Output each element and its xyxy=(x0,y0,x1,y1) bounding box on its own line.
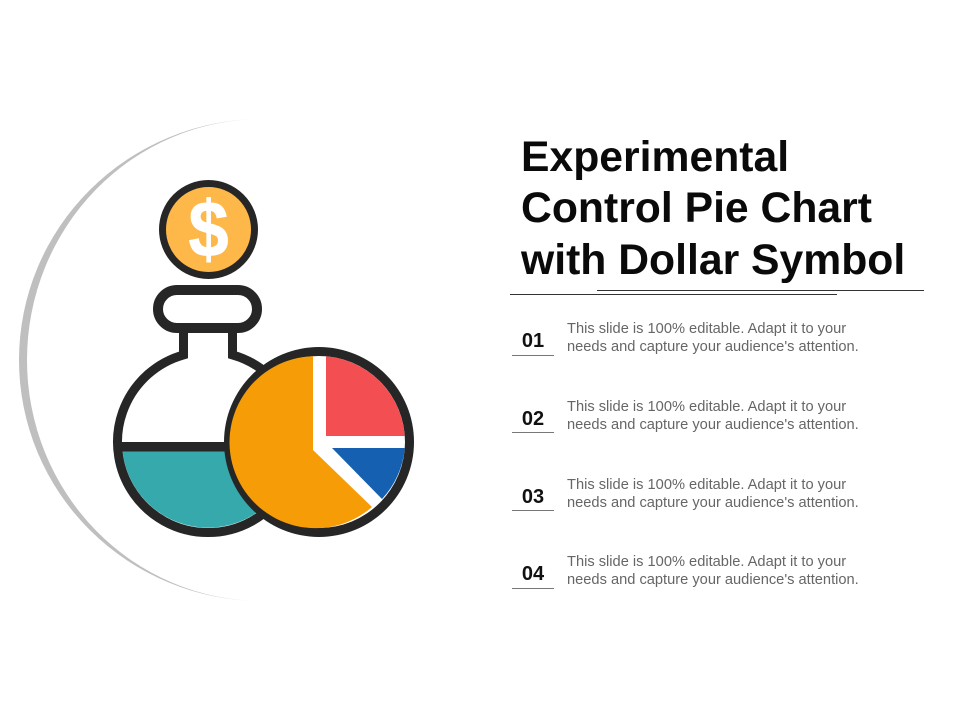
item 02 xyxy=(512,399,859,433)
item 04: needs and capture your audience's attention. xyxy=(567,572,859,588)
item 04: 04 xyxy=(522,563,544,585)
item 04: This slide is 100% editable. Adapt it to your xyxy=(567,554,846,570)
item 02: 02 xyxy=(522,408,544,430)
item 02: needs and capture your audience's attention. xyxy=(567,417,859,433)
item 01 xyxy=(512,321,859,356)
title rule upper xyxy=(597,290,924,291)
item 04 xyxy=(512,554,859,589)
pie chart xyxy=(224,347,414,537)
slice: blue xyxy=(332,448,405,499)
flask level line xyxy=(118,442,298,452)
flask body xyxy=(118,329,299,533)
title: with Dollar Symbol xyxy=(521,236,905,284)
slice: red xyxy=(326,356,405,436)
item 01: 01 xyxy=(522,330,544,352)
item 03: needs and capture your audience's attention. xyxy=(567,495,859,511)
graphic: flask, coin and pie chart inside arc xyxy=(19,120,414,600)
title rule lower xyxy=(510,294,837,295)
item 02: This slide is 100% editable. Adapt it to your xyxy=(567,399,846,415)
item 01: needs and capture your audience's attention. xyxy=(567,339,859,355)
item 03: 03 xyxy=(522,486,544,508)
decorative arc xyxy=(19,119,262,601)
flask stopper xyxy=(158,290,257,328)
icon: flask xyxy=(118,290,299,533)
slice: orange xyxy=(230,356,372,528)
title: Control Pie Chart xyxy=(521,184,872,232)
item 03 xyxy=(512,477,859,511)
title xyxy=(520,132,905,284)
item 01: This slide is 100% editable. Adapt it to your xyxy=(567,321,846,337)
item 03: This slide is 100% editable. Adapt it to your xyxy=(567,477,846,493)
icon: dollar coin: $ xyxy=(188,185,229,274)
title: Experimental xyxy=(521,132,789,180)
icon: dollar coin xyxy=(162,184,254,276)
flask liquid xyxy=(122,451,294,528)
